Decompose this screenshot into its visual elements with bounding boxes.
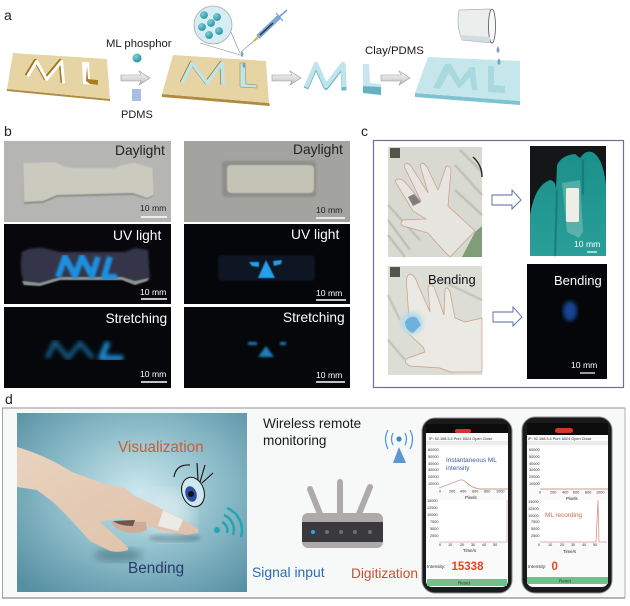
chart: instantaneous intensity: 200 bbox=[550, 490, 556, 494]
chart: ML recording: 20 bbox=[560, 543, 564, 547]
photo: bending glow: 10 mm bbox=[571, 360, 597, 370]
photo: dumbbell stretching bbox=[4, 307, 171, 388]
chart: recording: 5000 bbox=[430, 527, 438, 531]
phone 2: Reset bbox=[559, 578, 572, 584]
PDMS square bbox=[132, 89, 141, 101]
arrow 1 bbox=[121, 71, 150, 85]
chart: recording bbox=[427, 499, 508, 553]
chart: instantaneous intensity: 1000 bbox=[596, 490, 604, 494]
chart: instantaneous intensity: 200 bbox=[449, 490, 455, 494]
chart: instantaneous intensity: 30000 bbox=[428, 468, 439, 472]
phone 1: Reset bbox=[458, 580, 471, 586]
arrow 3 bbox=[381, 71, 410, 85]
photo: bending glow bbox=[527, 264, 607, 379]
magnified phosphor circle bbox=[194, 6, 240, 55]
photo: rectangle daylight bbox=[184, 141, 350, 222]
pouring droplets bbox=[496, 46, 500, 65]
chart: ML recording: 30 bbox=[571, 543, 575, 547]
label b: b bbox=[4, 123, 12, 139]
chart: instantaneous intensity: 40000 bbox=[428, 462, 439, 466]
chart: recording: 0 bbox=[439, 543, 441, 547]
chart: instantaneous intensity: 60000 bbox=[428, 448, 439, 452]
arrow right bbox=[493, 307, 522, 326]
chart: recording: 30 bbox=[471, 543, 475, 547]
chart: ML recording: 50 bbox=[593, 543, 597, 547]
chart: ML recording: 5000 bbox=[531, 527, 539, 531]
photo: dumbbell daylight: 10 mm bbox=[140, 203, 166, 213]
chart: instantaneous intensity: 40000 bbox=[529, 462, 540, 466]
label a: a bbox=[4, 7, 12, 23]
text wireless remote monitoring: monitoring bbox=[263, 433, 326, 448]
photo: rectangle UV: 10 mm bbox=[316, 288, 342, 298]
text Clay/PDMS: Clay/PDMS bbox=[365, 45, 424, 57]
chart: instantaneous intensity: 800 bbox=[585, 490, 591, 494]
phone 2: 0 bbox=[552, 561, 558, 573]
chart: instantaneous intensity: 20000 bbox=[428, 475, 439, 479]
curled fingers bbox=[111, 521, 147, 533]
chart: recording: 7500 bbox=[430, 520, 438, 524]
bandage bbox=[158, 510, 183, 531]
chart: instantaneous intensity: 600 bbox=[472, 490, 478, 494]
chart: recording: 10000 bbox=[427, 513, 438, 517]
label d: d bbox=[5, 391, 13, 407]
photo: dumbbell stretching: 10 mm bbox=[140, 369, 166, 379]
chart: instantaneous intensity: 30000 bbox=[529, 468, 540, 472]
chart: instantaneous intensity: 50000 bbox=[428, 455, 439, 459]
chart: recording: 2500 bbox=[430, 534, 438, 538]
panel c: wearable sensor bbox=[374, 140, 624, 388]
panel frame bbox=[2, 408, 625, 598]
photo: rectangle UV: UV light bbox=[291, 227, 339, 242]
icon: antenna bbox=[386, 430, 412, 463]
chart: ML recording: Time/s bbox=[563, 549, 577, 554]
photo: dumbbell UV: 10 mm bbox=[140, 287, 166, 297]
arrow right bbox=[492, 190, 521, 209]
phone 1 bbox=[422, 418, 512, 593]
chart: ML recording: ML recording bbox=[545, 512, 583, 519]
chart: instantaneous intensity: 0 bbox=[439, 490, 441, 494]
panel b: right column bbox=[184, 141, 350, 388]
droplets bbox=[240, 51, 246, 68]
chart: recording: 40 bbox=[482, 543, 486, 547]
phone 1: 15338 bbox=[452, 561, 484, 573]
chart: instantaneous intensity: intensity bbox=[446, 465, 470, 472]
syringe bbox=[241, 10, 287, 52]
photo: rectangle daylight: Daylight bbox=[293, 142, 343, 157]
photo: rectangle stretching: 10 mm bbox=[316, 370, 342, 380]
chart: recording: 20 bbox=[460, 543, 464, 547]
image: finger with sensor bbox=[17, 413, 247, 592]
chart: ML recording: 2500 bbox=[531, 534, 539, 538]
photo: rectangle daylight: 10 mm bbox=[316, 205, 342, 215]
text PDMS: PDMS bbox=[121, 109, 153, 121]
chart: ML recording bbox=[528, 500, 608, 554]
photo: bending glow: Bending bbox=[554, 273, 602, 288]
chart: instantaneous intensity: 10000 bbox=[428, 482, 439, 486]
chart: recording: 12500 bbox=[427, 506, 438, 510]
photo: dumbbell stretching: Stretching bbox=[106, 311, 167, 326]
chart: recording: 10 bbox=[448, 543, 452, 547]
chart: instantaneous intensity: 10000 bbox=[529, 482, 540, 486]
phone 1: IP: 92.168.3.4 Port: 6524 Open Close bbox=[429, 437, 492, 441]
arrow 2 bbox=[272, 71, 301, 85]
text signal input: Signal input bbox=[252, 564, 325, 580]
panel a: fabrication process bbox=[4, 6, 520, 121]
phone 2 bbox=[522, 417, 612, 593]
chart: instantaneous intensity: 50000 bbox=[529, 455, 540, 459]
wifi signal bbox=[214, 508, 242, 537]
chart: instantaneous intensity bbox=[529, 446, 608, 501]
photo: dumbbell daylight bbox=[4, 141, 171, 222]
chart: recording: 15000 bbox=[427, 499, 438, 503]
photo: rectangle stretching: Stretching bbox=[283, 310, 345, 325]
chart: instantaneous intensity: Pixels bbox=[566, 496, 579, 501]
panel b: left column bbox=[4, 141, 171, 388]
hand sketch with patch bbox=[388, 147, 482, 257]
ML shaped solids bbox=[306, 64, 381, 95]
chart: instantaneous intensity: 800 bbox=[484, 490, 490, 494]
label c: c bbox=[361, 123, 368, 139]
hand bbox=[17, 447, 198, 552]
chart: instantaneous intensity: 0 bbox=[539, 490, 541, 494]
panel frame bbox=[374, 140, 624, 388]
eye cartoon bbox=[174, 463, 213, 510]
chart: ML recording: 0 bbox=[538, 543, 540, 547]
chart: recording: Time/s bbox=[463, 548, 477, 553]
text digitization: Digitization bbox=[351, 566, 418, 581]
intensity readout: Intensity: bbox=[528, 564, 546, 569]
chart: recording: 50 bbox=[493, 543, 497, 547]
chart: instantaneous intensity: Instantaneous ML bbox=[446, 457, 497, 464]
icon: router bbox=[302, 482, 383, 548]
photo: dumbbell UV: UV light bbox=[113, 228, 161, 243]
photo: gloved finger bbox=[530, 146, 606, 256]
photo: rectangle UV bbox=[184, 224, 350, 304]
chart: instantaneous intensity: 400 bbox=[562, 490, 568, 494]
chart: ML recording: 7500 bbox=[531, 520, 539, 524]
chart: instantaneous intensity: 60000 bbox=[529, 448, 540, 452]
photo: rectangle stretching bbox=[184, 307, 350, 388]
hand sketch bending bbox=[388, 266, 482, 375]
chart: ML recording: 10000 bbox=[528, 514, 539, 518]
panel d: wireless monitoring bbox=[2, 408, 625, 598]
mold filled bbox=[162, 55, 270, 106]
photo: dumbbell daylight: Daylight bbox=[115, 143, 165, 158]
cast composite bbox=[415, 57, 520, 105]
chart: ML recording: 40 bbox=[582, 543, 586, 547]
chart: instantaneous intensity: 20000 bbox=[529, 475, 540, 479]
intensity readout: Intensity: bbox=[427, 564, 445, 569]
chart: instantaneous intensity: 1000 bbox=[496, 490, 504, 494]
mold with ML cutout bbox=[7, 53, 110, 101]
chart: instantaneous intensity: 600 bbox=[573, 490, 579, 494]
reset button bbox=[427, 579, 507, 586]
hand sketch bending: Bending bbox=[428, 272, 476, 287]
text Bending: Bending bbox=[128, 560, 184, 577]
chart: instantaneous intensity bbox=[428, 447, 508, 500]
glass beaker bbox=[458, 9, 496, 43]
photo: gloved finger: 10 mm bbox=[574, 239, 600, 249]
phosphor ball bbox=[132, 54, 142, 62]
chart: instantaneous intensity: Pixels bbox=[465, 495, 478, 500]
phone 2: IP: 92.168.3.4 Port: 6524 Open Close bbox=[528, 437, 591, 441]
text ML phosphor: ML phosphor bbox=[106, 38, 172, 50]
photo: dumbbell UV bbox=[4, 224, 171, 304]
chart: ML recording: 15000 bbox=[528, 500, 539, 504]
chart: ML recording: 10 bbox=[548, 543, 552, 547]
text Visualization: Visualization bbox=[118, 439, 204, 456]
chart: ML recording: 12500 bbox=[528, 507, 539, 511]
reset button bbox=[527, 577, 608, 584]
text wireless remote monitoring: Wireless remote bbox=[263, 416, 361, 431]
chart: instantaneous intensity: 400 bbox=[460, 490, 466, 494]
